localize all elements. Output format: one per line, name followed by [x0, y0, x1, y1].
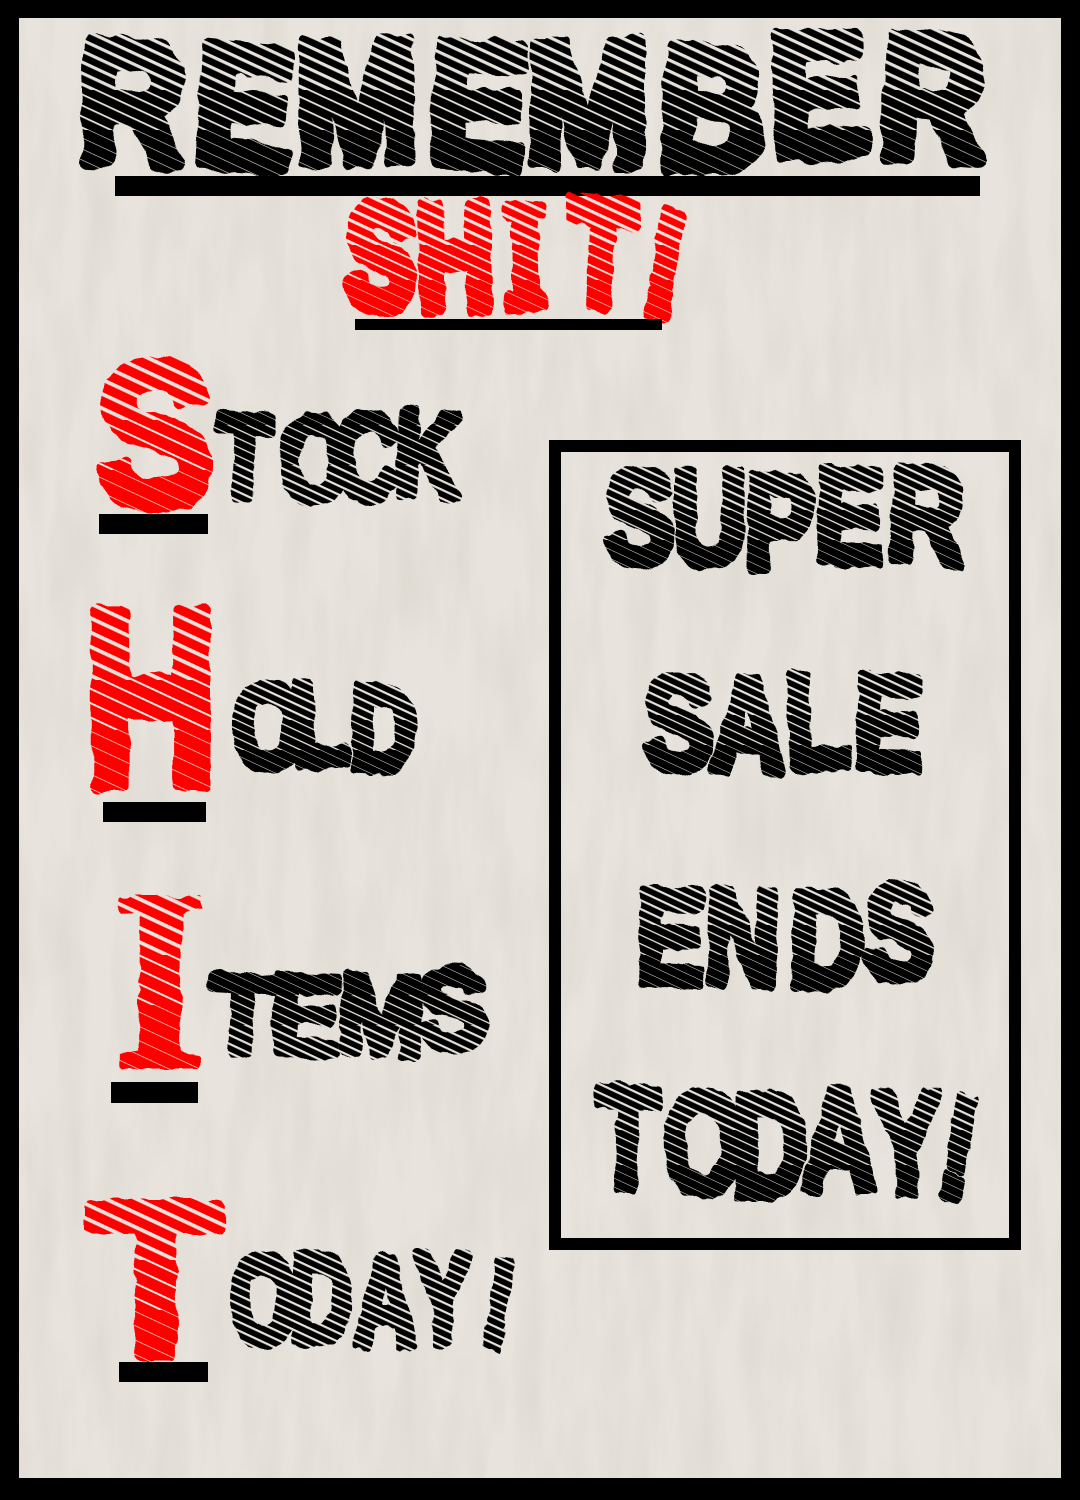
red initial T: T: [88, 1156, 223, 1403]
T underline: [119, 1362, 208, 1382]
subtitle: SHIT!: SH: [342, 173, 496, 343]
word OLD: OLD: [232, 654, 419, 797]
title: REMEMBER: REMEMBER: [76, 0, 989, 208]
word SUPER: SUPER: [602, 439, 967, 599]
red initial S: S: [96, 323, 214, 549]
word ENDS: ENDS: [634, 857, 936, 1016]
word TODAY!: TODAY!: [593, 1056, 989, 1233]
box outline: [555, 446, 1015, 1244]
S underline: [99, 514, 208, 534]
I underline: [111, 1082, 198, 1103]
panel: super sale box: [555, 439, 1015, 1244]
title underline: [115, 176, 980, 196]
word SALE: SALE: [641, 645, 926, 801]
word TOCK: TOCK: [213, 386, 463, 529]
subtitle: SHIT!: T!: [565, 169, 696, 350]
word TEMS: TEMS: [207, 947, 488, 1080]
subtitle: SHIT!: I: [502, 172, 548, 338]
acrostic row: Today!: [82, 1196, 515, 1382]
red initial I: I: [113, 838, 207, 1121]
acrostic row: Stock: [96, 356, 464, 534]
red initial H: H: [85, 558, 217, 839]
subtitle: SHIT!: [342, 192, 687, 324]
subtitle underline: [355, 319, 662, 330]
word ODAY!: ODAY!: [230, 1226, 524, 1378]
acrostic row: Hold: [90, 603, 418, 822]
H underline: [103, 802, 206, 822]
acrostic row: Items: [111, 894, 490, 1103]
